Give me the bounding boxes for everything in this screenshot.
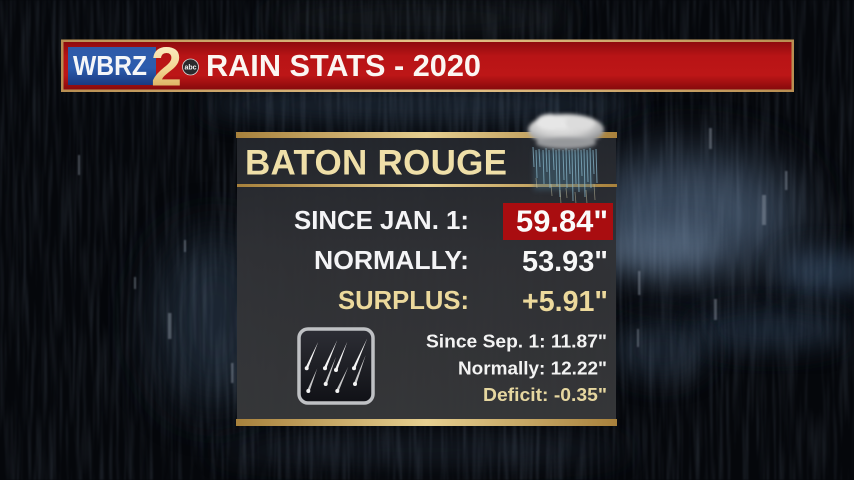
icon: rain cloud [528, 114, 604, 204]
WBRZ 2 abc logo: abc [184, 64, 197, 72]
header banner [61, 36, 794, 98]
panel top gold rule [236, 132, 617, 138]
stat row: since Jan. 1 [294, 203, 613, 240]
bright rain streaks [78, 128, 788, 383]
stat row: surplus: +5.91" [522, 286, 608, 318]
icon: rain drops tile [299, 329, 373, 403]
panel: Baton Rouge stats [236, 114, 617, 426]
panel background [237, 133, 616, 425]
banner gold frame and red bar [61, 40, 794, 92]
heading rule [237, 184, 617, 187]
text block: since Sep. 1: Since Sep. 1: 11.87" [426, 332, 607, 352]
stat row: surplus: SURPLUS: [338, 285, 469, 315]
highlighted value: 59.84" [516, 204, 608, 238]
text block: since Sep. 1: Deficit: -0.35" [483, 385, 607, 405]
WBRZ 2 abc logo [68, 36, 198, 98]
WBRZ 2 abc logo: WBRZ [73, 50, 147, 81]
text block: since Sep. 1: Normally: 12.22" [458, 358, 607, 378]
stat row: since Jan. 1: SINCE JAN. 1: [294, 205, 469, 235]
stat row: normally: 53.93" [522, 246, 608, 278]
panel bottom gold rule [236, 419, 617, 426]
city heading: BATON ROUGE [245, 144, 507, 182]
text block: since Sep. 1 [426, 332, 607, 405]
banner title: RAIN STATS - 2020 [206, 49, 481, 83]
stat row: normally [314, 245, 608, 278]
WBRZ 2 abc logo: 2 [151, 36, 182, 98]
stat row: normally: NORMALLY: [314, 245, 469, 275]
stat row: surplus [338, 285, 608, 318]
